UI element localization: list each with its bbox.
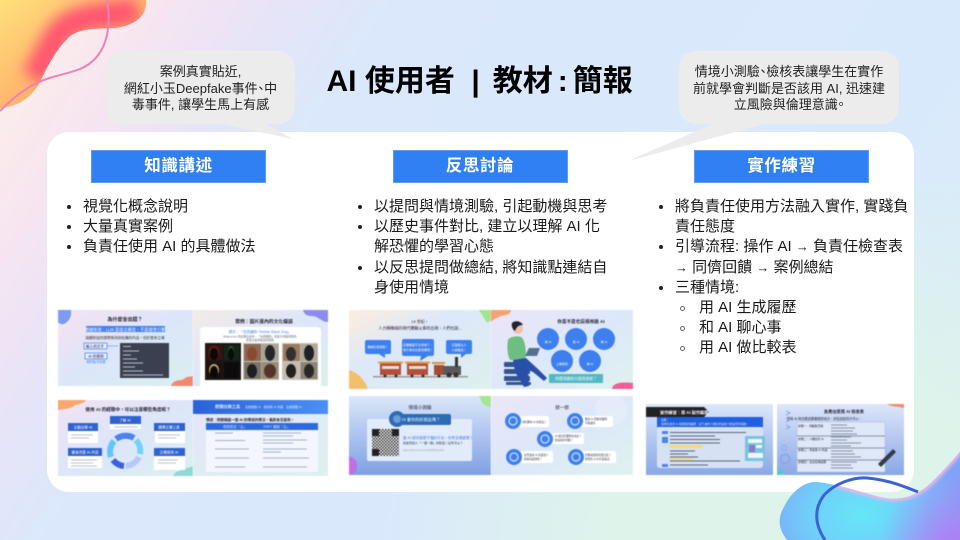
slide thumbnail: usage cycle: 正確使用 AI: [160, 450, 178, 454]
slide thumbnail: usage cycle: 主動出擊 AI: [74, 424, 92, 430]
slide thumbnail: think about it: 你會對 AI 有什麼看法: [585, 457, 610, 461]
slide thumbnail: why images appear: 輸入的文字: [86, 344, 104, 348]
heading: knowledge: [91, 150, 266, 183]
slide thumbnail: AI checklist: 負責任使用 AI 檢查表: [824, 408, 865, 415]
text block: reflection list: 解恐懼的學習心態: [374, 238, 494, 255]
slide thumbnail: 19th century train: 人力轉機械的現代運輸火車的出現，人們也說...: [378, 324, 462, 330]
slide thumbnail: usage cycle: 了解 AI: [119, 418, 131, 422]
slide thumbnail: 19th century train: 用不用也比較會累吧！: [403, 347, 433, 352]
text block: reflection list: 身使用情境: [374, 279, 449, 296]
heading: reflection: 反思討論: [446, 157, 514, 175]
callout: right speech bubble: [630, 51, 899, 160]
slide thumbnail: cultural bias case: Midjourney 的反應比較中，「在西藏的」的提示會被判別為: [223, 334, 297, 338]
slide thumbnail: think about it: 你如何處理呢？: [524, 457, 542, 461]
slide thumbnail: AI checklist: 步驟一：判斷能否用: [798, 424, 823, 428]
callout: left speech bubble: [106, 51, 295, 139]
slide thumbnail: think about it: 想一想: [555, 404, 569, 410]
slide thumbnail: AI checklist: 步驟二：人機協作 AI: [798, 437, 824, 441]
slide thumbnail: why images appear: [57, 309, 194, 387]
slide thumbnail: AI checklist: [776, 403, 905, 476]
text block: practice list: 引導流程: 操作 AI → 負責任檢查表: [675, 238, 903, 255]
slide thumbnail: person with laptop and AI use cases: 上傳資料: [556, 361, 568, 366]
text block: reflection list: 以反思提問做總結, 將知識點連結自: [374, 259, 607, 276]
slide thumbnail: practice instructions: [645, 404, 774, 476]
text block: practice list: → 同儕回饋 → 案例總結: [675, 259, 834, 276]
slide thumbnail: why images appear: 他們還不知道: [86, 359, 106, 364]
slide thumbnail: AI checklist: 運用 AI 時也應該要審視的地方，評估該如何才可以：: [787, 416, 862, 421]
text block: reflection list: [358, 198, 607, 296]
heading: practice: 實作練習: [747, 157, 816, 175]
slide thumbnail: scenario quiz with QR code: https://www.edu.com/s/ai2025/quiz/link: [403, 449, 445, 452]
text block: practice list: 用 AI 做比較表: [699, 339, 797, 356]
slide thumbnail: think about it: 不能避免: [585, 421, 596, 425]
slide thumbnail: person with laptop and AI use cases: 用 AI: [601, 340, 607, 344]
slide thumbnail: person with laptop and AI use cases: 你是不是也這樣用過 AI: [557, 318, 605, 325]
text block: knowledge list: 視覺化概念說明: [83, 198, 188, 215]
text block: knowledge list: 負責任使用 AI 的具體做法: [83, 238, 256, 255]
slide thumbnail: scenario quiz with QR code: 當 AI 說你還是不懂的平台，你會怎樣處理？: [403, 435, 473, 440]
slide thumbnail: person with laptop and AI use cases: 用 AI: [545, 340, 551, 344]
slide thumbnail: checklist table: 情境情況「主」: [223, 424, 247, 429]
slide thumbnail: cultural bias case: 黑暗元素的輸出的風格: [246, 338, 274, 342]
slide thumbnail: checklist table: 情境：把關機器一個 AI 的情境的情況，看起來怎麼用。: [206, 417, 294, 422]
decorative warm blob top left: [0, 0, 146, 112]
slide thumbnail: think about it: 何時應用 AI 的想法？: [522, 420, 547, 424]
text block: practice list: 用 AI 生成履歷: [699, 299, 797, 316]
slide thumbnail: 19th century train: 它還能比人: [451, 342, 467, 347]
slide thumbnail: think about it: 你該如何判斷？: [555, 438, 573, 442]
slide thumbnail: scenario quiz with QR code: 和並增加人「一個一體」的對話！這件可以？: [403, 440, 463, 445]
slide thumbnail: why images appear: 接續對話的提問常用到知識的內容，但於是有立場: [85, 335, 165, 340]
slide thumbnail: cultural bias case: 案例：圖片庫內的文化偏誤: [235, 318, 293, 325]
text block: practice list: 責任態度: [675, 218, 735, 235]
slide thumbnail: 19th century train: 人還做活！: [451, 347, 467, 352]
slide thumbnail: think about it: AI 如何影響你的決定？: [555, 434, 582, 438]
text block: practice list: 和 AI 聊心事: [699, 319, 782, 336]
slide thumbnail: usage cycle: 選擇正確工具: [158, 424, 180, 430]
slide thumbnail: person with laptop and AI use cases: [490, 309, 634, 390]
slide thumbnail: why images appear: 關鍵原理：LLM 是語言模型，不是搜尋引擎: [85, 326, 166, 333]
heading: practice: [694, 150, 869, 183]
slide thumbnail: checklist table: 把關任務工具: [215, 403, 241, 410]
decorative cool blob bottom right: [780, 452, 960, 540]
slide thumbnail: practice instructions: 實作練習：用 AI 製作履歷: [660, 409, 709, 416]
slide thumbnail: person with laptop and AI use cases: 用 AI: [587, 362, 593, 366]
callout: left speech bubble: 毒事件, 讓學生馬上有感: [132, 97, 269, 112]
heading: reflection: [392, 150, 568, 183]
slide thumbnail: why images appear: 為什麼會出錯？: [107, 316, 143, 323]
slide thumbnail: 19th century train: 這種機器不太會用了，: [403, 342, 433, 347]
slide thumbnail: scenario quiz with QR code: 情境小測驗: [409, 404, 432, 411]
slide thumbnail: scenario quiz with QR code: [348, 395, 492, 476]
slide thumbnail: why images appear: AI 的預測: [88, 354, 104, 358]
slide thumbnail: checklist table: 主動把關 AI 審視用 AI 內容 主動把關 AI: [245, 404, 302, 409]
slide thumbnail: think about it: [490, 396, 634, 476]
heading: knowledge: 知識講述: [144, 157, 213, 175]
slide thumbnail: cultural bias case: [192, 309, 329, 386]
callout: right speech bubble: 前就學會判斷是否該用 AI, 迅速建: [693, 81, 885, 96]
slide thumbnail: usage cycle: 使用 AI 的經驗中，可以注意哪些角度呢？: [85, 406, 171, 413]
slide thumbnail: AI checklist: 步驟四：注意使用倫理: [798, 460, 826, 464]
callout: right speech bubble: 情境小測驗、檢核表讓學生在實作: [695, 64, 883, 79]
text block: reflection list: 以提問與情境測驗, 引起動機與思考: [374, 198, 607, 215]
slide thumbnail: usage cycle: [57, 399, 194, 477]
text block: reflection list: 以歷史事件對比, 建立以理解 AI 化: [374, 218, 600, 235]
text block: practice list: 三種情境:: [675, 279, 739, 296]
text block: practice list: [659, 198, 908, 356]
slide thumbnail: practice instructions: 使用生成式 AI 和撰寫的履歷，記下讓他人更好的自我介紹是否有幫助。: [661, 422, 749, 426]
callout: right speech bubble: 立風險與倫理意識。: [734, 97, 844, 112]
slide thumbnail: AI checklist: 步驟三：查核用 AI 內容: [798, 448, 828, 452]
callout: left speech bubble: 網紅小玉Deepfake事件、中: [124, 81, 277, 96]
text block: practice list: 將負責任使用方法融入實作, 實踐負: [675, 198, 908, 215]
slide thumbnail: 19th century train: [348, 309, 492, 390]
slide thumbnail: think about it: 是否使用 AI 的道德？: [524, 453, 549, 457]
slide thumbnail: scenario quiz with QR code: AI 會你的好朋友嗎？: [402, 416, 440, 423]
slide thumbnail: practice instructions: 任務：: [661, 418, 669, 422]
slide thumbnail: checklist table: [192, 399, 329, 476]
main white card: [47, 132, 914, 492]
text block: knowledge list: [67, 198, 256, 255]
slide thumbnail: 19th century train: 機械比較危險！: [367, 344, 389, 349]
slide thumbnail: 19th century train: 19 世紀，: [411, 318, 429, 324]
slide thumbnail: think about it: 對應用資料時會怎樣？: [585, 453, 611, 457]
slide thumbnail: cultural bias case: 提示：「在西藏的 Tibetan Black Dog」: [229, 329, 291, 334]
text block: knowledge list: 大量真實案例: [83, 218, 173, 235]
title: AI 使用者 | 教材:簡報: [326, 65, 633, 98]
slide thumbnail: think about it: 應用 AI 帶來的優勢: [585, 417, 607, 421]
slide thumbnail: checklist table: TFIFT 機制「主」: [263, 424, 290, 429]
slide thumbnail: usage cycle: 審查改善 AI 內容: [72, 450, 99, 454]
slide thumbnail: person with laptop and AI use cases: 你還用過有什麼用途呢？: [555, 376, 597, 381]
slide thumbnail: person with laptop and AI use cases: 用 AI: [573, 340, 579, 344]
callout: left speech bubble: 案例真實貼近,: [160, 64, 241, 79]
